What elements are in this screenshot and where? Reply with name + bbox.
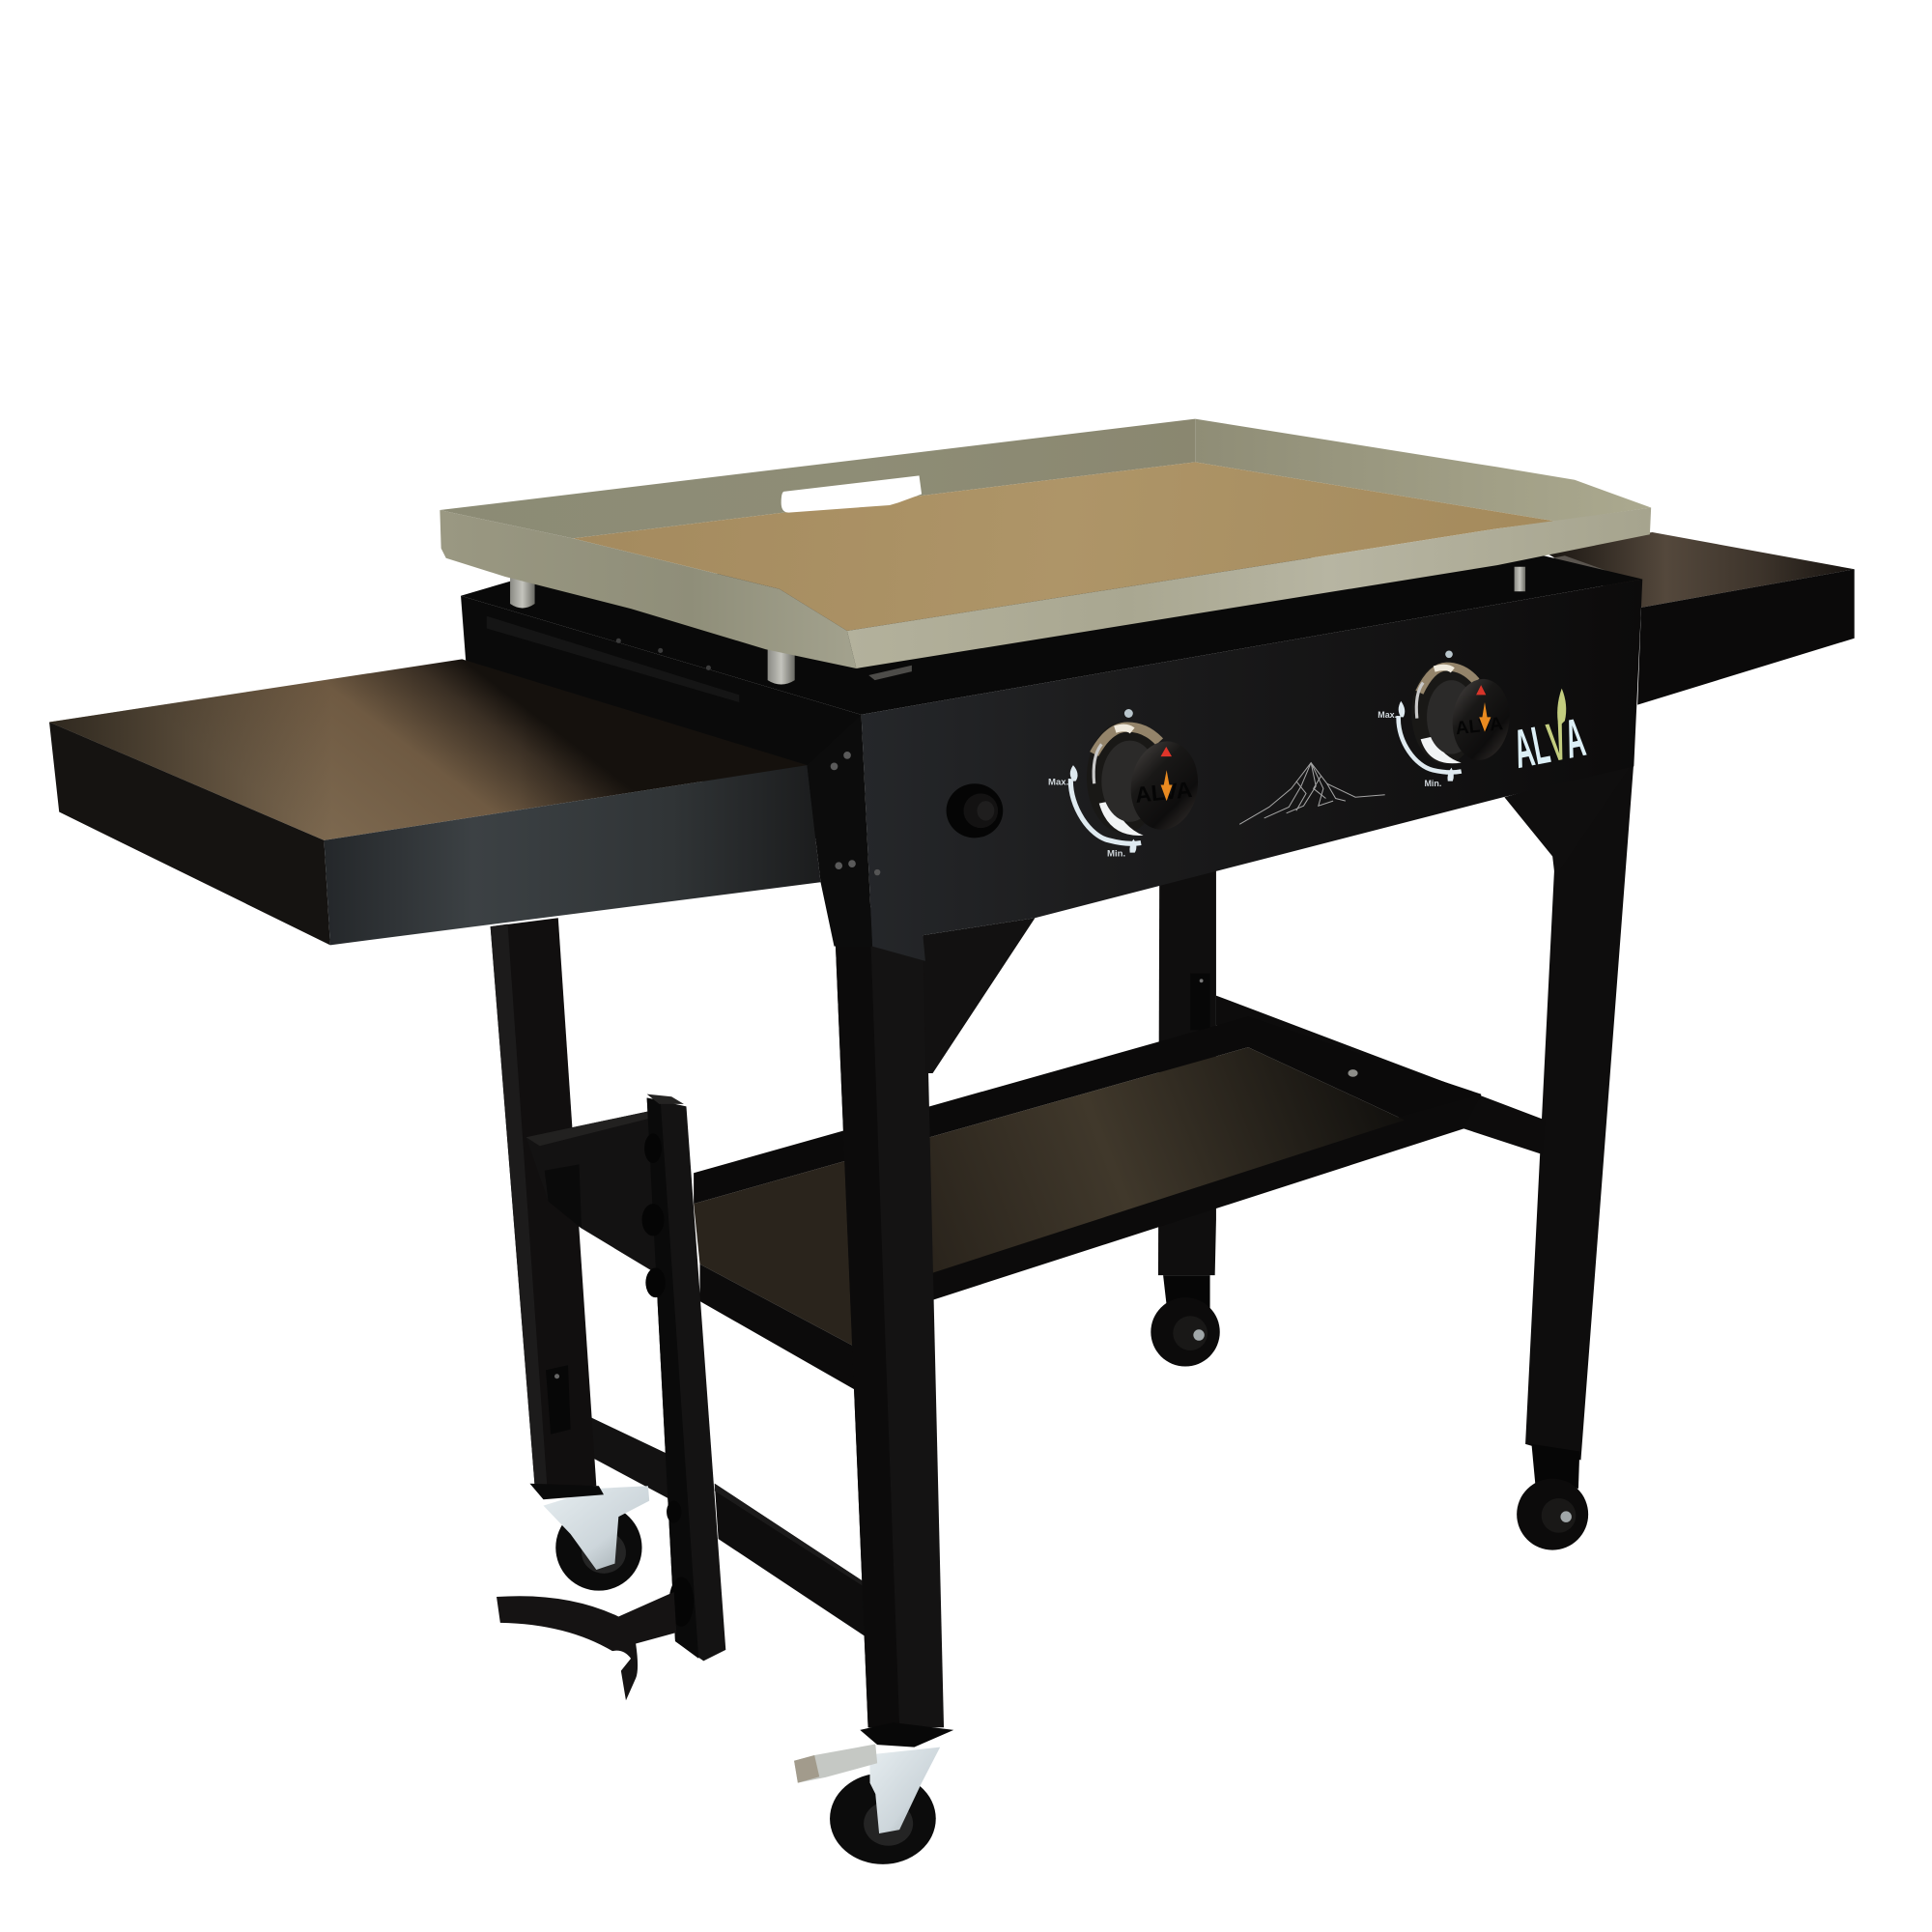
vertical tool holder (642, 1094, 725, 1661)
lower rear rail (567, 1406, 670, 1499)
igniter button (947, 783, 1003, 838)
left burner knob (1048, 709, 1204, 859)
shelf front lip (929, 1094, 1481, 1301)
front left leg (833, 882, 953, 1747)
front caster (794, 1744, 940, 1864)
side strip with bolts (807, 715, 880, 947)
griddle front outer wall (847, 508, 1651, 668)
right burner knob: Max. (1378, 710, 1397, 720)
lower shelf and rails (567, 996, 1545, 1636)
left side shelf (49, 659, 820, 945)
right shelf top (1540, 532, 1855, 608)
rear right leg and caster (1517, 761, 1634, 1550)
front control panel (807, 579, 1642, 961)
mountain line art (1239, 763, 1385, 824)
right shelf hinge (1539, 555, 1613, 577)
right side shelf (1539, 532, 1855, 705)
shelf surface (694, 1047, 1405, 1346)
griddle cooking surface (573, 462, 1555, 631)
left burner knob: ALVA (1134, 777, 1193, 808)
right shelf front (1637, 569, 1855, 705)
rear rail and shelf lip (694, 1016, 1481, 1204)
front gusset bracket (923, 906, 1042, 1073)
rear left leg and caster (491, 918, 649, 1591)
left burner knob: Min. (1107, 848, 1125, 859)
upper bracket of the tool holder (526, 1112, 659, 1275)
right burner knob: ALVA (1455, 714, 1504, 739)
griddle back inner wall (440, 419, 1195, 538)
left burner knob: Max. (1048, 777, 1068, 787)
griddle right inner wall (1195, 419, 1651, 522)
lower front rail (715, 1484, 865, 1636)
rear middle leg and caster (1151, 850, 1220, 1367)
griddle body top and side frame (461, 552, 1642, 863)
ALVA logo: ALVA (1509, 707, 1590, 781)
griddle left outer wall (440, 510, 856, 668)
rear right rail (1216, 996, 1545, 1154)
grease handle cut-out (781, 475, 922, 513)
right burner knob: Min. (1425, 779, 1441, 788)
shelf left rail (699, 1264, 855, 1390)
right burner knob (1378, 650, 1514, 788)
griddle flat top (440, 419, 1651, 668)
griddle support posts (510, 567, 1525, 685)
right gusset bracket (1504, 761, 1634, 877)
foot pedal (497, 1592, 676, 1700)
